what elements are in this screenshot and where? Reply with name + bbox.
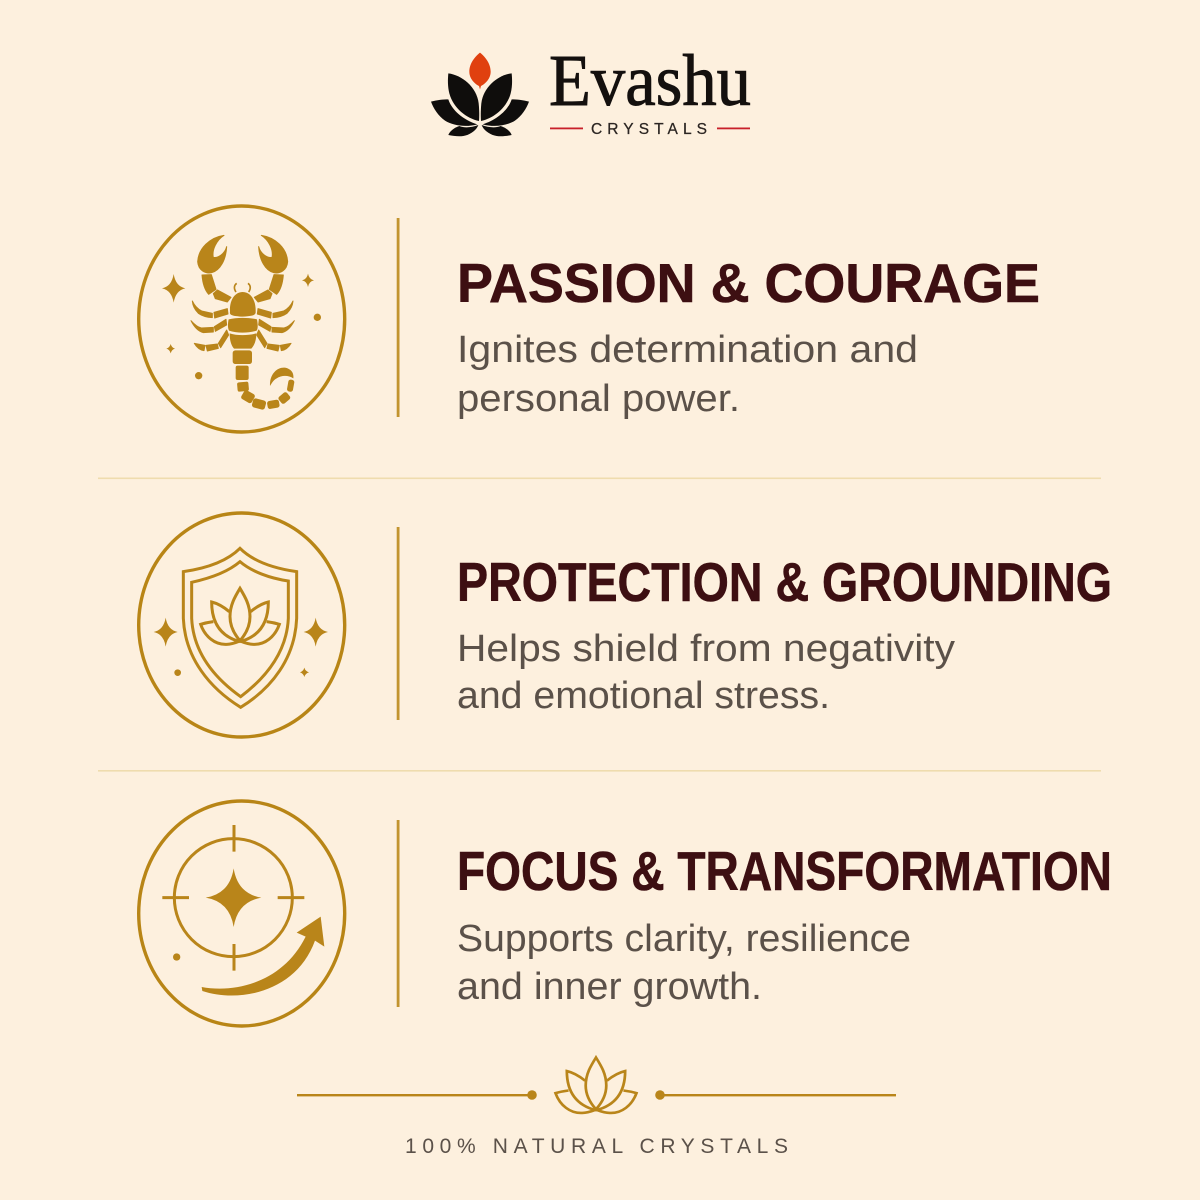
brand tagline: CRYSTALS [591, 121, 707, 138]
icon: lotus logo [431, 53, 529, 136]
icon: scorpion badge [139, 206, 345, 432]
icon: shield badge [139, 513, 345, 737]
panel: protection and grounding [139, 513, 1112, 737]
icon: lotus [556, 1058, 636, 1113]
description: Supports clarity, resilience [457, 918, 911, 960]
brand name: Evashu [549, 40, 751, 121]
description: Ignites determination and [457, 329, 918, 371]
vertical rule [397, 218, 400, 417]
vertical rule [397, 820, 400, 1007]
brand logo [431, 40, 751, 138]
footer text: 100% NATURAL CRYSTALS [405, 1135, 788, 1158]
description line 2: personal power. [457, 378, 740, 420]
right rule and dot [655, 1090, 896, 1100]
vertical rule [397, 527, 400, 720]
icon: target and arrow badge [139, 801, 345, 1026]
panel: focus and transformation [139, 801, 1112, 1026]
description line 2: and inner growth. [457, 966, 762, 1008]
footer ornament [297, 1058, 896, 1113]
description line 2: and emotional stress. [457, 675, 830, 717]
left rule and dot [297, 1090, 537, 1100]
panel: passion and courage [139, 206, 1040, 432]
heading: PASSION & COURAGE [457, 252, 1040, 314]
description: Helps shield from negativity [457, 628, 955, 670]
